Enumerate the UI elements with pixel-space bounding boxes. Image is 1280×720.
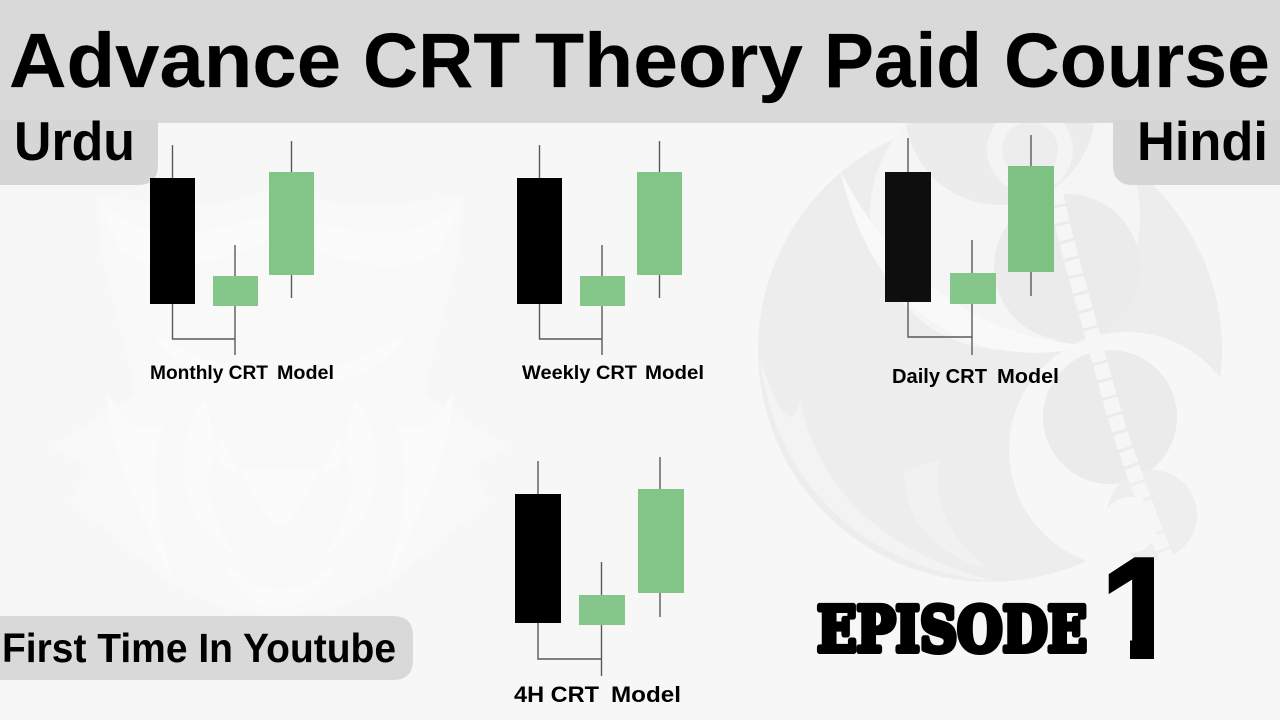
Monthly CRT model: Monthly CRT [150, 363, 268, 384]
tag: Hindi [1113, 110, 1280, 185]
tag: Hindi: Hindi [1137, 110, 1268, 172]
spiral watermark [758, 15, 1245, 582]
title text: Theory [535, 18, 803, 104]
title banner [0, 0, 1280, 123]
4H CRT model: Model [611, 682, 681, 707]
tag: Urdu: Urdu [14, 110, 135, 172]
Weekly CRT model: Weekly CRT [522, 363, 637, 384]
Daily CRT model: Daily CRT [892, 365, 987, 388]
tiger head watermark [51, 185, 509, 616]
episode number: 1 [1101, 529, 1180, 688]
title text: CRT [363, 18, 520, 104]
title text: Course [1004, 18, 1270, 104]
Weekly CRT model: Model [645, 363, 704, 384]
4H CRT model: 4H CRT [514, 682, 600, 707]
Monthly CRT model: Model [277, 363, 334, 384]
episode label: EPISODE [817, 593, 1087, 666]
tag: Urdu [0, 110, 158, 185]
title text [9, 18, 1270, 104]
Daily CRT model [885, 135, 1059, 388]
4H CRT model [514, 457, 684, 707]
Daily CRT model: Model [997, 365, 1059, 388]
title text: Advance [9, 18, 341, 104]
title text: Paid [824, 18, 982, 104]
Weekly CRT model [517, 141, 704, 384]
episode label [816, 557, 1154, 659]
tag: First Time In Youtube: First Time In Youtube [2, 625, 396, 671]
Monthly CRT model [150, 141, 334, 384]
